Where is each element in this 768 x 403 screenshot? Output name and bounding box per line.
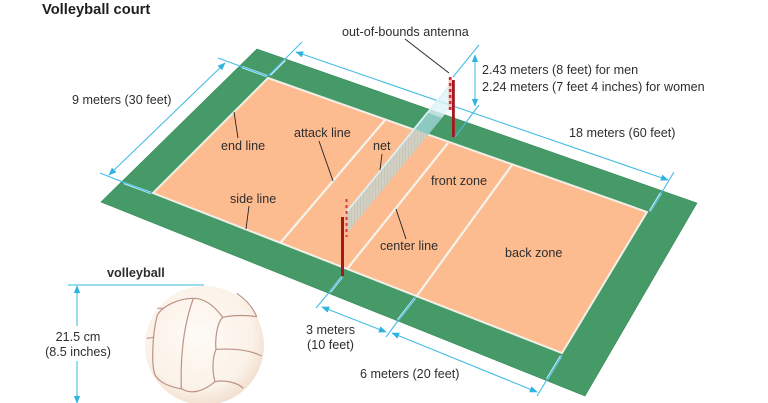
near antenna and post — [341, 199, 346, 276]
ball dimension — [68, 285, 204, 403]
label: 18 meters: 18 meters (60 feet) — [569, 126, 675, 140]
free zone — [101, 49, 697, 396]
title: Volleyball court — [42, 2, 150, 18]
label: front zone: front zone — [431, 174, 487, 188]
leader lines — [234, 39, 449, 239]
label: center line: center line — [380, 239, 438, 253]
label: ball size: (8.5 inches) — [45, 345, 111, 359]
label: 6 meters: 6 meters (20 feet) — [360, 367, 459, 381]
label: net height: 2.43 meters (8 feet) for men — [482, 63, 638, 77]
label: end line: end line — [221, 139, 265, 153]
label: net: net — [373, 139, 391, 153]
icon: volleyball — [145, 286, 264, 403]
label: back zone: back zone — [505, 246, 562, 260]
label: net height: 2.24 meters (7 feet 4 inches) for women — [482, 80, 705, 94]
net — [345, 85, 450, 233]
court diagram — [101, 49, 697, 396]
dimension: 18 meters — [268, 42, 674, 212]
blue dimension lines — [100, 42, 674, 396]
label: 9 meters: 9 meters (30 feet) — [72, 93, 171, 107]
pale extension strips on free zone — [124, 60, 661, 379]
label: 3 meters: 3 meters — [306, 323, 355, 337]
label: ball size: 21.5 cm — [56, 330, 100, 344]
dimension: net height — [453, 45, 479, 137]
label: volleyball: volleyball — [107, 266, 165, 280]
far antenna and post — [448, 77, 455, 137]
label: attack line: attack line — [294, 126, 351, 140]
dimension: 9 meters — [100, 58, 267, 193]
court lines — [281, 120, 512, 297]
playing court — [153, 78, 647, 353]
label: side line: side line — [230, 192, 276, 206]
dimension: 3 and 6 meters — [316, 277, 562, 396]
label: out-of-bounds antenna: out-of-bounds antenna — [342, 25, 469, 39]
label: 3 meters: (10 feet) — [307, 338, 354, 352]
